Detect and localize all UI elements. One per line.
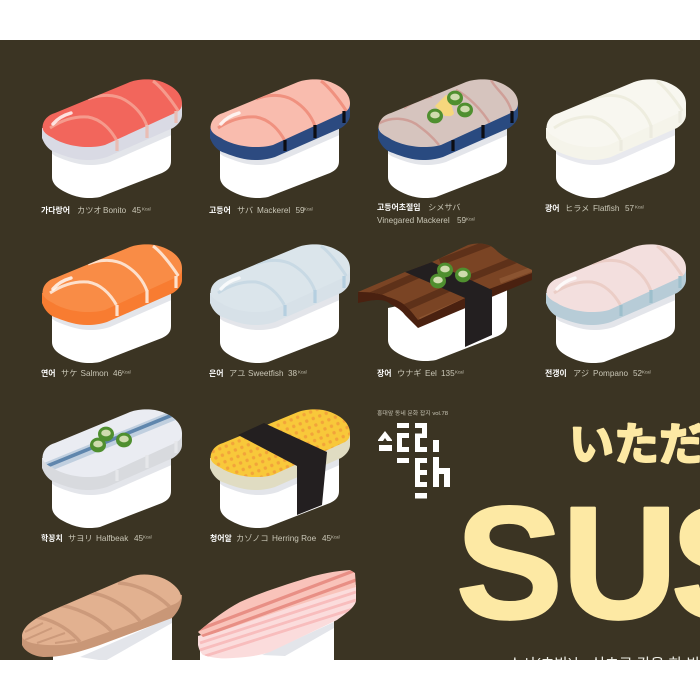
sushi: flatfish: 광어	[545, 203, 560, 213]
sushi: halfbeak	[40, 409, 185, 543]
sushi: herring roe: 청어알	[210, 533, 233, 543]
sushi: pompano: 전갱이	[545, 368, 567, 378]
sushi: mackerel: Mackerel	[257, 206, 290, 215]
sushi: vinegared mackerel	[377, 79, 521, 225]
sushi: bonito: Kcal	[142, 206, 151, 212]
eel side	[358, 260, 532, 328]
sushi: grilled brown	[22, 574, 182, 660]
sushi: pompano	[545, 244, 689, 378]
sushi: sweetfish: Kcal	[298, 370, 307, 374]
sushi: sweetfish: アユ	[229, 369, 245, 378]
sushi: sweetfish	[209, 244, 353, 378]
sushi: salmon: 46	[113, 369, 123, 378]
sushi: sweetfish: Sweetfish	[248, 369, 284, 378]
sushi: vinegared mackerel: シメサバ	[428, 203, 460, 212]
sushi: bonito: 가다랑어	[41, 205, 70, 215]
sushi: eel: Kcal	[455, 370, 464, 374]
sushi: halfbeak: サヨリ	[68, 534, 93, 543]
nori band	[405, 262, 492, 347]
sushi: salmon: Salmon	[80, 369, 109, 378]
sushi: vinegared mackerel: Kcal	[466, 216, 475, 222]
bottom white band	[0, 660, 700, 700]
sushi: vinegared mackerel: 고등어초절임	[377, 202, 421, 212]
sushi: herring roe: Herring Roe	[272, 534, 317, 543]
logo	[378, 423, 450, 498]
sushi: flatfish: 57	[625, 204, 635, 213]
sushi: bonito	[41, 79, 185, 215]
sushi: bonito: Bonito	[103, 206, 127, 215]
sushi: herring roe: Kcal	[331, 534, 340, 540]
sushi: pink striped	[198, 570, 356, 660]
sushi: mackerel: サバ	[237, 206, 253, 215]
sushi: bonito: カツオ	[77, 206, 102, 215]
sushi: mackerel: Kcal	[304, 206, 313, 212]
sushi: herring roe: 45	[322, 534, 332, 543]
sushi: pompano: Kcal	[642, 370, 651, 374]
sushi: mackerel: 59	[296, 206, 305, 215]
sushi: halfbeak: Kcal	[143, 534, 152, 540]
sushi: flatfish: Flatfish	[593, 204, 620, 213]
sushi: vinegared mackerel: Vinegared Mackerel	[377, 216, 450, 225]
sushi: halfbeak: 학꽁치	[41, 533, 63, 543]
sushi: salmon: 연어	[41, 368, 56, 378]
magazine tagline: 홍대앞 동네 문화 잡지 vol.78	[377, 409, 449, 417]
sushi: pompano: アジ	[573, 369, 589, 378]
sushi: eel	[358, 244, 532, 377]
sushi: eel: ウナギ	[397, 369, 422, 378]
sushi: flatfish	[545, 79, 689, 213]
sushi: flatfish: ヒラメ	[565, 204, 589, 213]
top white band	[0, 0, 700, 40]
sushi: mackerel: 고등어	[209, 205, 231, 215]
sushi: halfbeak: 45	[134, 534, 144, 543]
sushi: eel: 장어	[377, 368, 392, 378]
sushi: herring roe	[210, 409, 353, 543]
sushi: mackerel	[209, 79, 353, 215]
eel top surface	[358, 244, 532, 320]
sushi: halfbeak: Halfbeak	[96, 534, 129, 543]
sushi: vinegared mackerel: 59	[457, 216, 467, 225]
sushi: sweetfish: 38	[288, 369, 298, 378]
sushi: flatfish: Kcal	[635, 204, 644, 210]
sushi: salmon: Kcal	[122, 370, 131, 374]
sushi: pompano: Pompano	[593, 369, 628, 378]
sushi: salmon: サケ	[61, 369, 77, 378]
sushi: salmon	[41, 244, 185, 378]
sushi: eel: 135	[441, 369, 455, 378]
sushi: eel: Eel	[425, 369, 437, 378]
sushi: pompano: 52	[633, 369, 643, 378]
sushi: herring roe: カゾノコ	[236, 534, 269, 543]
ginger	[435, 95, 454, 116]
sushi: bonito: 45	[132, 206, 142, 215]
sushi: sweetfish: 은어	[209, 368, 224, 378]
